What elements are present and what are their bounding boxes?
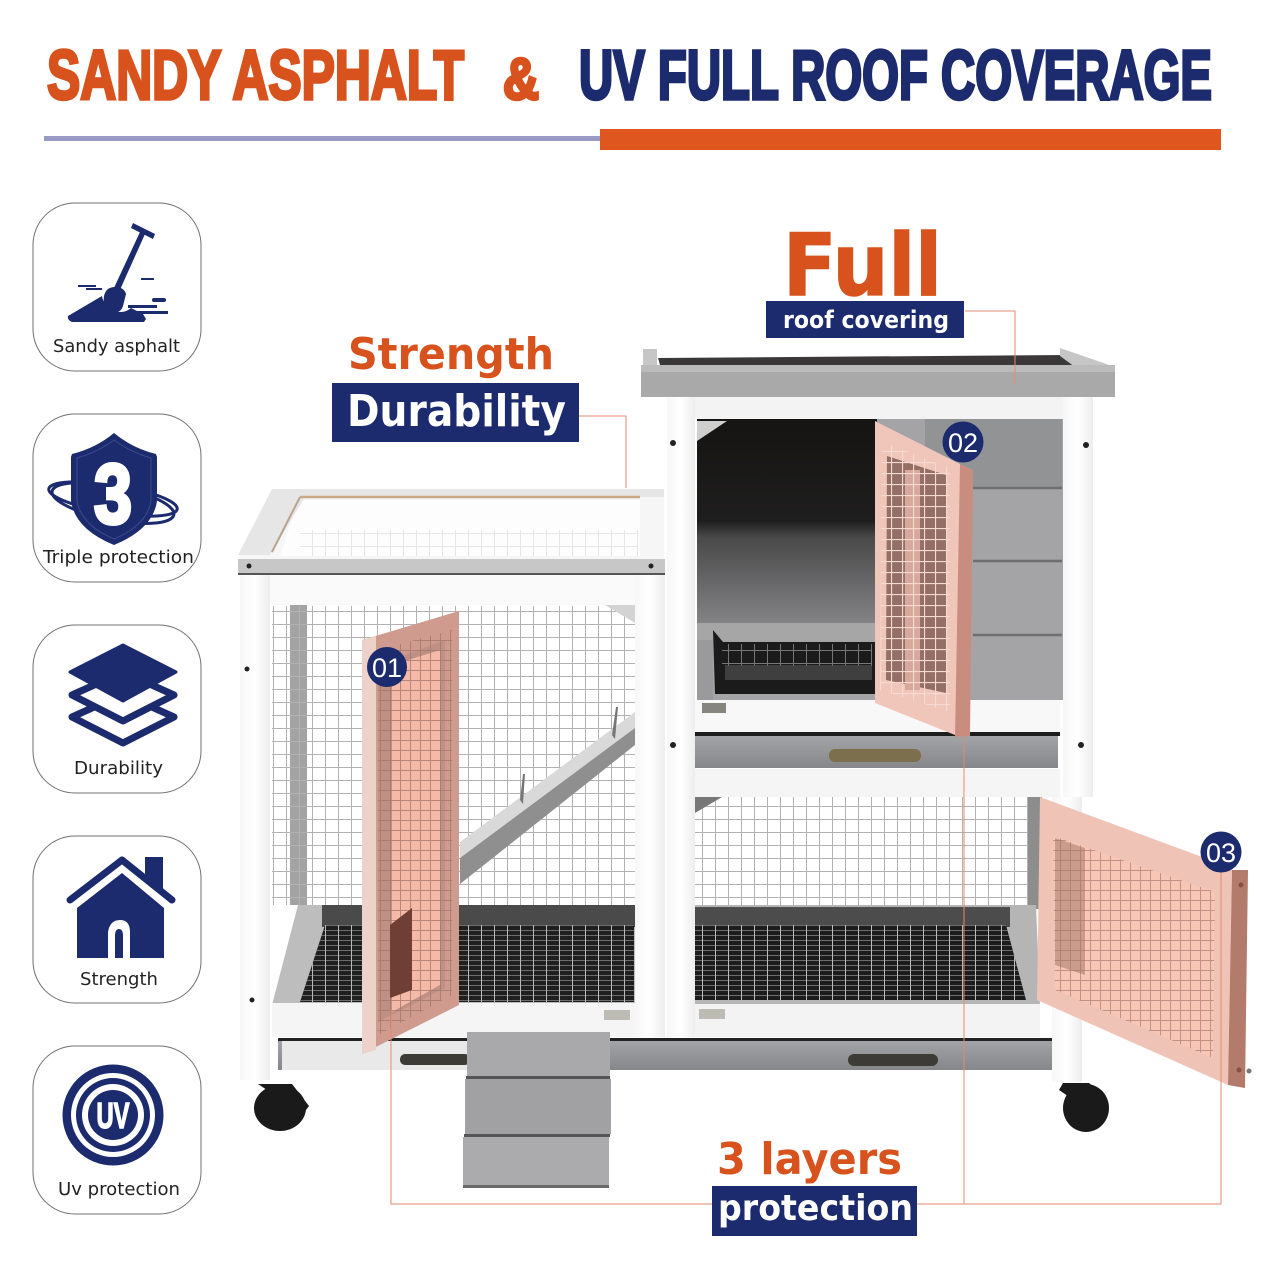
marker 03 xyxy=(1200,832,1242,872)
panel: strength xyxy=(33,836,201,1003)
big word: Full xyxy=(783,216,942,316)
word: Strength xyxy=(348,329,554,380)
word: 3 layers xyxy=(717,1134,902,1185)
label: Uv protection xyxy=(58,1179,180,1200)
icon: shield with number three: 3 xyxy=(94,447,132,541)
door 01 xyxy=(362,611,459,1054)
marker 01: 01 xyxy=(372,653,402,683)
callout lines xyxy=(391,311,1221,1204)
icon: uv rings: UV xyxy=(96,1095,130,1136)
icon: stacked layers xyxy=(70,645,176,743)
header rule xyxy=(44,129,1221,150)
rabbit hutch xyxy=(238,348,1252,1188)
navy tag xyxy=(712,1186,917,1236)
label: Triple protection xyxy=(42,547,194,568)
panel: sandy asphalt xyxy=(33,203,201,371)
bottom drawer xyxy=(278,1038,1056,1070)
right section: hutch frame xyxy=(240,397,1093,1082)
marker 02 xyxy=(942,422,984,462)
title: sandy asphalt: SANDY ASPHALT xyxy=(47,36,464,114)
callout: strength durability xyxy=(332,329,579,442)
right section: roof xyxy=(641,348,1115,397)
door 02 xyxy=(875,421,973,737)
tag text: protection xyxy=(718,1188,913,1229)
left run: floor tray xyxy=(272,905,635,1037)
icon: house xyxy=(70,857,172,958)
navy tag xyxy=(332,383,579,442)
left run: frame and mesh xyxy=(268,575,636,925)
left run: lid xyxy=(238,489,665,575)
panel: triple protection xyxy=(33,414,201,582)
panel: durability xyxy=(33,625,201,793)
label: Strength xyxy=(80,969,158,990)
marker 01 xyxy=(367,647,407,687)
middle drawer xyxy=(695,736,1058,768)
icon: uv rings xyxy=(62,1064,164,1166)
right section: lower mesh and tray xyxy=(695,797,1042,1037)
marker 03: 03 xyxy=(1206,838,1236,868)
tag text: Durability xyxy=(347,386,566,437)
door 03 xyxy=(1037,797,1252,1088)
callout: full roof covering xyxy=(766,216,964,338)
right section: upper compartment xyxy=(697,419,1063,713)
wheels xyxy=(254,1083,1109,1132)
callout: 3 layers protection xyxy=(712,1134,917,1236)
pull-out ramp steps xyxy=(463,1032,611,1188)
tag text: roof covering xyxy=(783,306,949,334)
label: Sandy asphalt xyxy=(53,336,180,357)
marker 02: 02 xyxy=(948,428,978,458)
panel: uv protection xyxy=(33,1046,201,1214)
icon: shovel and pile xyxy=(68,223,168,322)
title xyxy=(47,36,1212,114)
left run: ramp xyxy=(460,707,635,884)
icon: shield with number three xyxy=(47,433,179,545)
label: Durability xyxy=(74,758,163,779)
navy tag xyxy=(766,301,964,338)
title: ampersand: & xyxy=(503,47,539,112)
